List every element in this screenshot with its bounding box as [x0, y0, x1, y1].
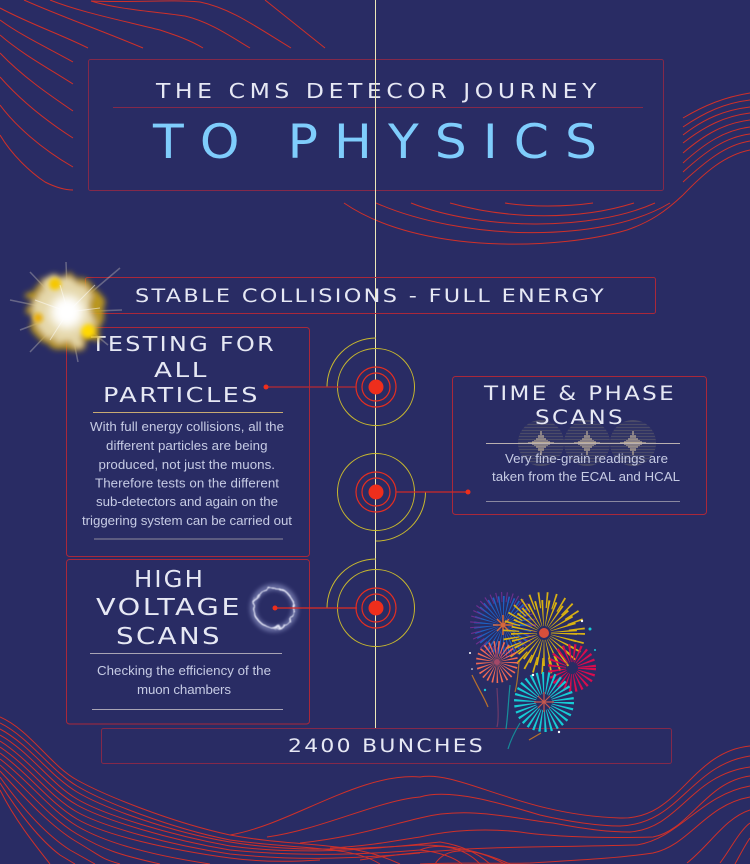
body text: testing: produced, not just the muons.	[98, 457, 275, 472]
panel: title box	[88, 60, 664, 190]
connector: row two	[396, 490, 470, 494]
banner: 2400 bunches: 2400 BUNCHES	[288, 735, 485, 757]
firework: salmon	[485, 650, 509, 674]
panel: testing for all particles	[66, 328, 310, 556]
icon: waveforms	[510, 420, 660, 466]
heading: high voltage: SCANS	[116, 624, 222, 650]
body text: testing: different particles are being	[106, 438, 268, 453]
body text: time and phase: taken from the ECAL and HCAL	[492, 469, 680, 484]
heading: testing: TESTING FOR	[90, 332, 276, 356]
body text: time and phase: Very fine-grain readings are	[505, 451, 668, 466]
body text: testing: triggering system can be carried out	[82, 513, 292, 528]
heading: high voltage: HIGH	[134, 567, 205, 593]
body text: testing: sub-detectors and again on the	[96, 494, 278, 509]
body text: high voltage: muon chambers	[137, 682, 231, 697]
heading: testing: PARTICLES	[103, 383, 260, 407]
banner: 2400 bunches	[102, 728, 672, 764]
decorative waves: bottom	[0, 717, 750, 864]
banner: stable collisions	[86, 278, 656, 314]
firework: blue	[475, 597, 531, 653]
connector: row three	[272, 606, 357, 610]
body text: high voltage	[97, 663, 271, 697]
body text: testing	[82, 419, 292, 528]
decorative waves: right of title	[683, 93, 750, 195]
body text: time and phase	[492, 451, 680, 484]
icon: explosion	[10, 262, 122, 362]
firework: cyan	[525, 683, 563, 721]
firework: yellow	[511, 600, 577, 666]
decorative waves: top left	[0, 0, 325, 190]
target: row three	[327, 559, 414, 646]
firework tails	[472, 662, 541, 749]
target: row one	[327, 338, 414, 426]
heading: time and phase: SCANS	[535, 406, 625, 429]
decorative waves: below title	[344, 195, 683, 244]
heading: high voltage	[96, 567, 242, 650]
firework sparks	[469, 620, 596, 733]
icon: fireworks	[469, 597, 596, 749]
heading: time and phase: TIME & PHASE	[483, 382, 676, 405]
timeline axis	[374, 0, 376, 728]
body text: high voltage: Checking the efficiency of the	[97, 663, 271, 678]
panel: time and phase scans	[452, 376, 706, 514]
title line two: TO PHYSICS	[152, 115, 613, 170]
panel: high voltage scans	[66, 560, 310, 724]
body text: testing: Therefore tests on the different	[95, 476, 279, 490]
connector: row one	[264, 384, 357, 390]
target: row two	[338, 454, 426, 541]
firework: magenta	[557, 653, 587, 683]
title line one: THE CMS DETECOR JOURNEY	[155, 79, 601, 103]
icon: plasma ring	[253, 587, 295, 629]
heading: high voltage: VOLTAGE	[96, 595, 242, 621]
heading: testing	[90, 332, 276, 407]
heading: time and phase	[483, 382, 676, 429]
heading: testing: ALL	[154, 358, 209, 382]
title divider	[113, 106, 643, 108]
body text: testing: With full energy collisions, all the	[90, 419, 284, 434]
banner: stable collisions: STABLE COLLISIONS - FULL ENERGY	[135, 285, 606, 307]
